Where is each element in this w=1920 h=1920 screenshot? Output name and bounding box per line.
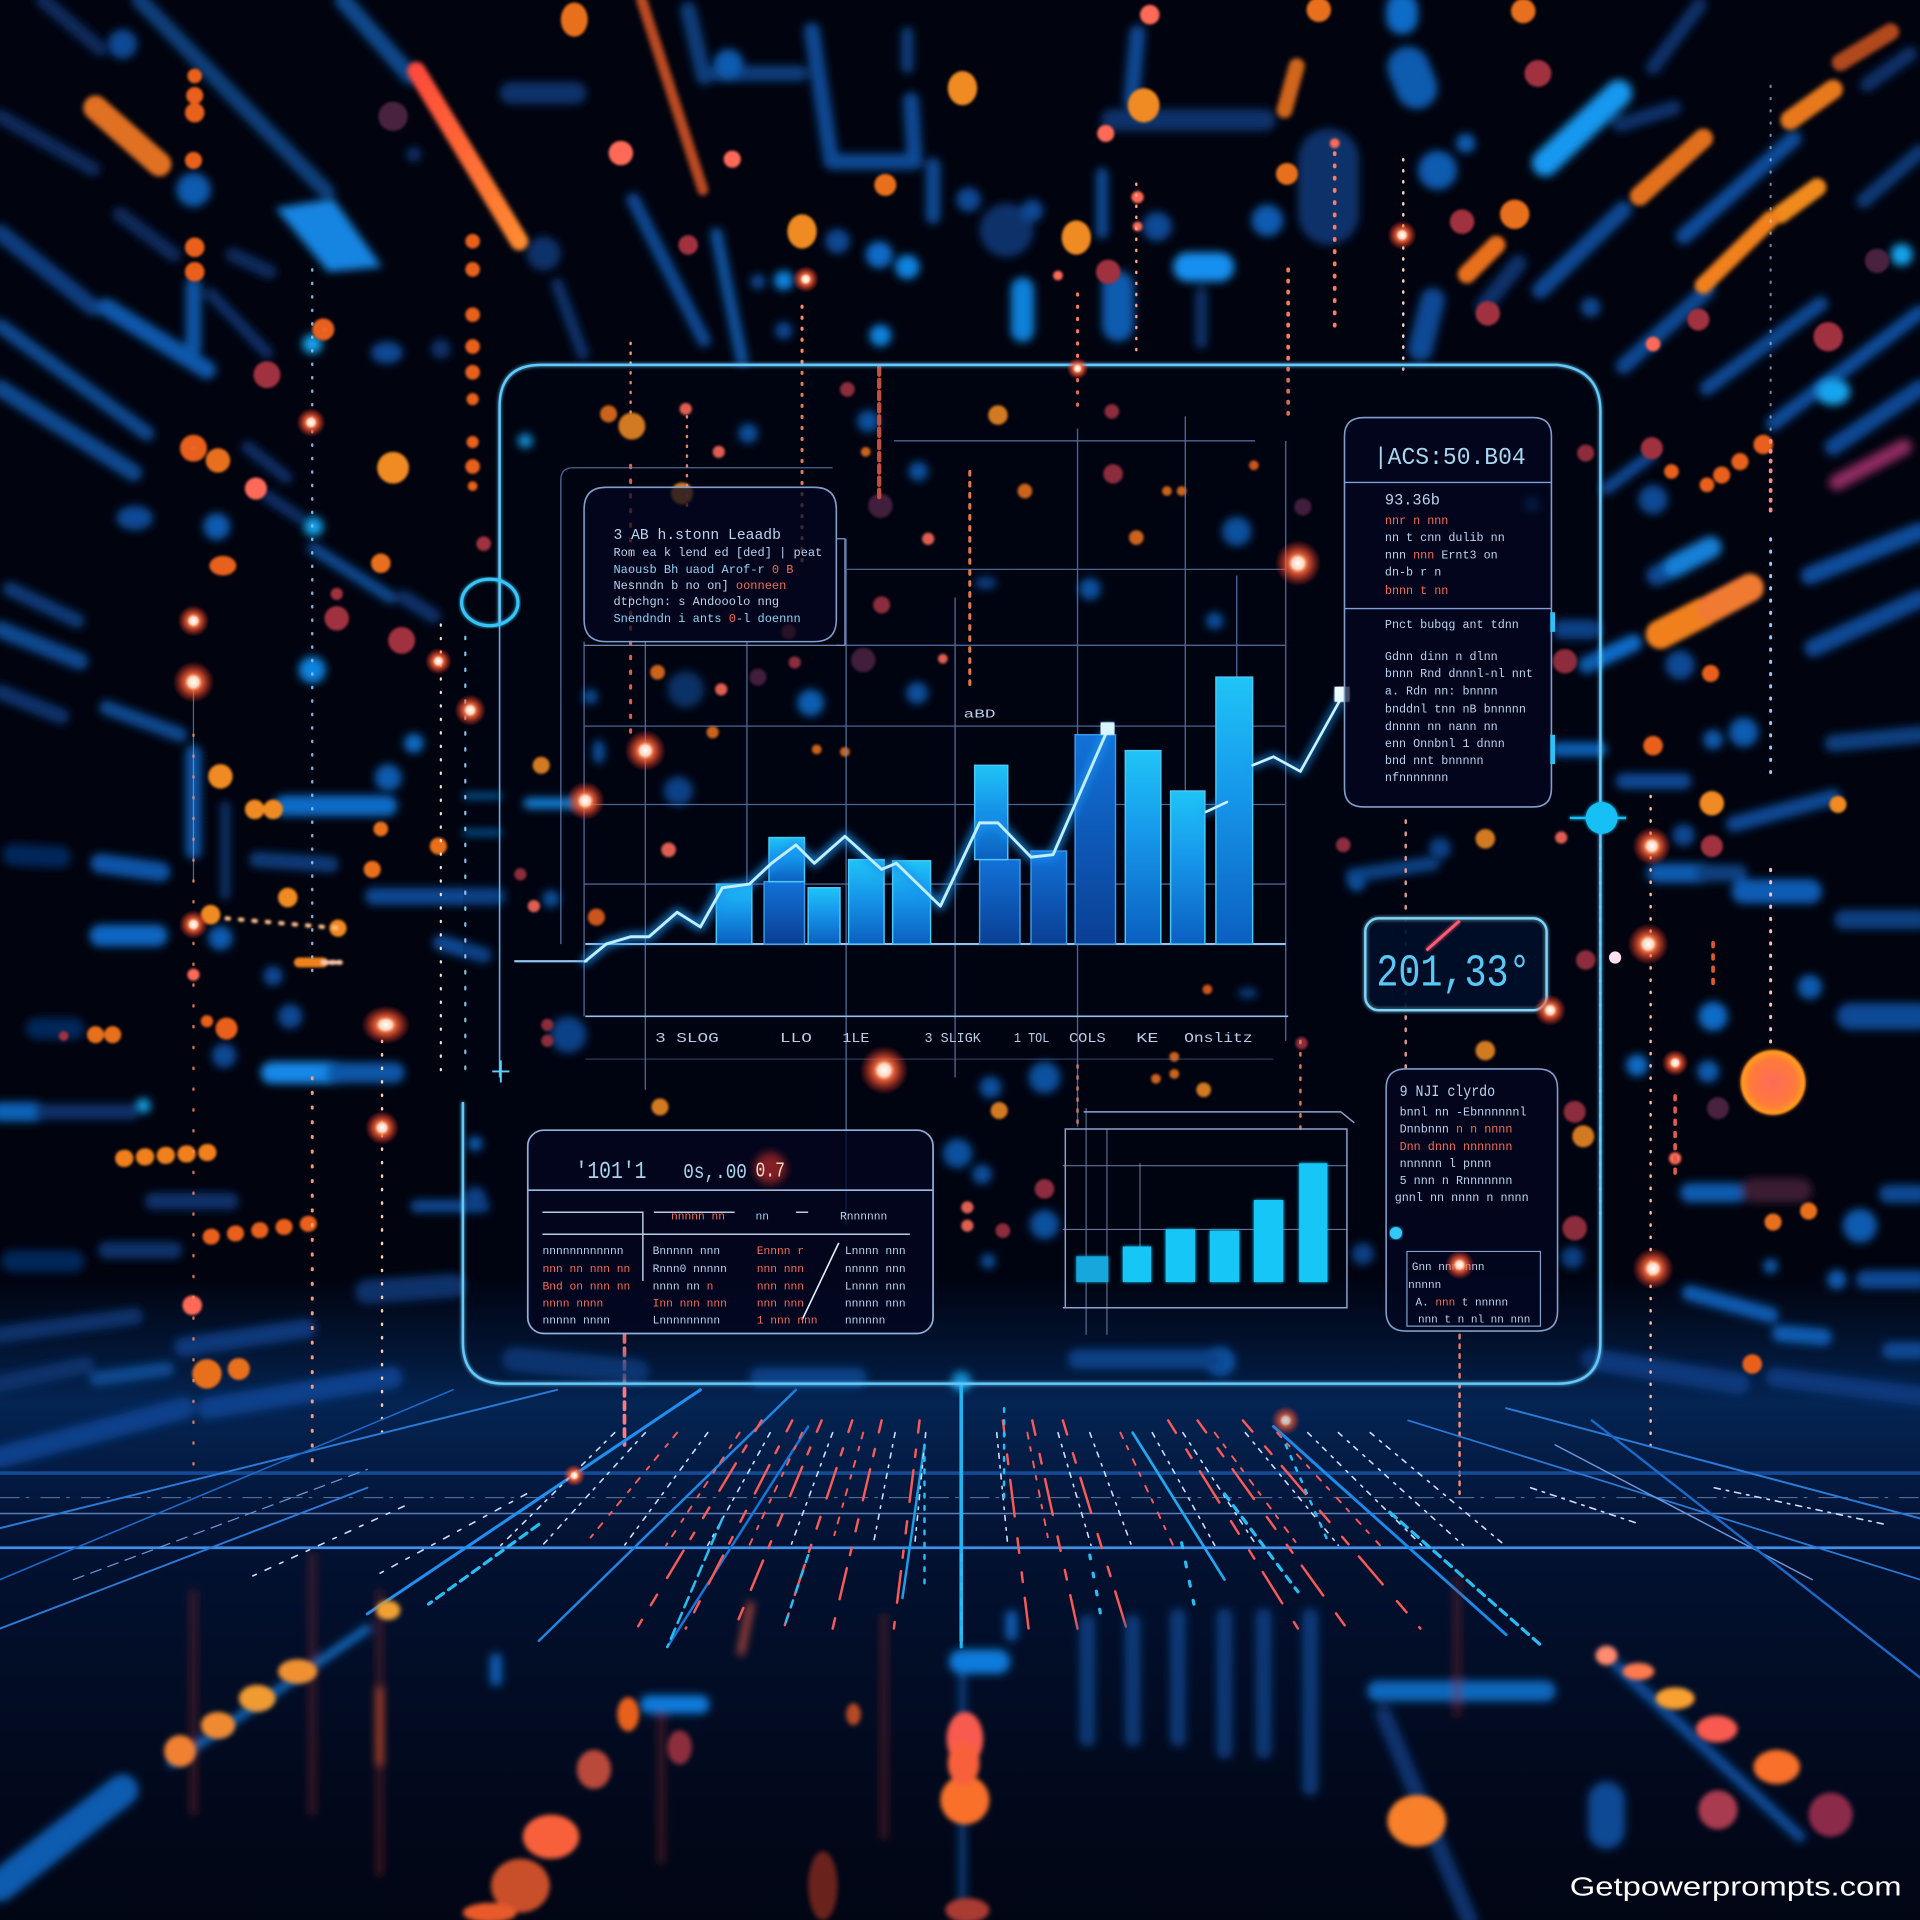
table rows: nnnnn nnnn — [542, 1316, 610, 1328]
floor foreground: blurred streaks and blobs — [0, 1359, 1800, 1920]
x-axis labels: KE — [1136, 1032, 1158, 1047]
floor: perspective grid — [0, 1386, 1920, 1817]
sub card text: nnnnn — [1408, 1280, 1441, 1292]
panel: readout — [1365, 918, 1547, 1010]
chart axes — [514, 944, 1288, 1016]
card text: Naousb Bh uaod Arof-r 0 B — [613, 563, 794, 577]
table rows: nnnnnnnnnnnn — [542, 1246, 623, 1258]
table rows: nnnnn nn — [671, 1212, 725, 1224]
card body — [1386, 1069, 1558, 1331]
card text: nnnnnn l pnnn — [1400, 1157, 1491, 1171]
readout tick — [1427, 921, 1460, 950]
table body — [528, 1130, 933, 1333]
card text: bnd nnt bnnnnn — [1385, 754, 1484, 768]
bars: back layer dark — [764, 735, 1116, 944]
bokeh orange and magenta dots — [59, 0, 1889, 1389]
table rows: nnnnn nnn — [845, 1299, 906, 1311]
x-axis labels: 3 SLOG — [655, 1032, 719, 1047]
table rows: Lnnnn nnn — [845, 1246, 906, 1258]
card text: bnnn Rnd dnnnl-nl nnt — [1385, 667, 1533, 681]
readout value: 201,33° — [1376, 948, 1531, 1000]
card text: a. Rdn nn: bnnnn — [1385, 684, 1498, 698]
card text: 3 AB h.stonn Leaadb — [613, 528, 781, 544]
card body — [1344, 418, 1551, 807]
right wall: blurred blue data bars — [1353, 5, 1920, 1396]
table rows: nnnn nn n — [653, 1281, 713, 1293]
panel: bottom left table — [528, 1130, 933, 1333]
hot glowing points — [173, 220, 1689, 1487]
table rows: nn — [756, 1212, 769, 1224]
icon: right node — [1570, 802, 1626, 834]
table rows: Bnd on nnn nn — [542, 1281, 630, 1293]
floor data dashes: red — [584, 1420, 1420, 1629]
top: blurred blue data bars — [511, 9, 1518, 360]
icon: oval node — [462, 579, 518, 626]
dotted vertical data streams — [193, 86, 1771, 1494]
card text: 9 NJI clyrdo — [1400, 1083, 1495, 1101]
card text: nn t cnn dulib nn — [1385, 531, 1505, 545]
sub card text: nnn t n nl nn nnn — [1418, 1314, 1530, 1326]
sub card text — [1408, 1262, 1530, 1326]
panel: bottom left table: 0s,.00 — [683, 1162, 747, 1185]
table rows: Rnnn0 nnnnn — [653, 1264, 727, 1276]
table rows: nnn nn nnn nn — [542, 1264, 630, 1276]
icon: cross marker — [492, 1060, 509, 1082]
card edge markers — [1551, 612, 1555, 764]
table rows: 1 nnn nnn — [757, 1316, 818, 1328]
panel left rail — [499, 624, 501, 1078]
card text: bnddnl tnn nB bnnnnn — [1385, 703, 1526, 717]
watermark: Getpowerprompts.com — [1570, 1874, 1902, 1902]
readout box — [1365, 918, 1547, 1010]
card text: Pnct bubqg ant tdnn — [1385, 618, 1519, 632]
icon: cyan card dot — [1390, 1227, 1402, 1239]
table rows: nnn nnn — [757, 1264, 804, 1276]
card text: dnnnn nn nann nn — [1385, 720, 1498, 734]
small chart frame — [1063, 1108, 1354, 1335]
floor data dashes: cyan — [429, 1408, 1543, 1647]
x-axis labels: 1 TOL — [1014, 1032, 1049, 1047]
card text: 93.36b — [1385, 491, 1440, 509]
blue bokeh cluster — [108, 29, 1913, 1391]
icon: large orange sphere — [1740, 1049, 1806, 1116]
table heading: '101'1 — [576, 1159, 647, 1186]
floor horizontal grid lines — [0, 1473, 1920, 1817]
table rows: nnn nnn — [757, 1299, 804, 1311]
x-axis labels: LLO — [780, 1032, 812, 1047]
x-axis labels: Onslitz — [1184, 1032, 1253, 1047]
table rows: nnnnnn — [845, 1316, 885, 1328]
floor perspective rays — [0, 1386, 1920, 1678]
card text: Dnn dnnn nnnnnnn — [1400, 1140, 1512, 1154]
table rows — [542, 1212, 906, 1328]
floor data dashes: light — [245, 1433, 1886, 1580]
chart grid — [561, 416, 1286, 1224]
table rows: Ennnn r — [757, 1246, 804, 1258]
table rows: Lnnnnnnnnn — [653, 1316, 720, 1328]
sub card text: Gnn nnnnnnn — [1412, 1262, 1485, 1274]
card text: Snendndn i ants 0-l doennn — [613, 612, 801, 626]
card text: Dnnbnnn n n nnnn — [1400, 1123, 1512, 1137]
x-axis labels — [655, 708, 1253, 1047]
x-axis labels: 3 SLIGK — [924, 1032, 982, 1047]
card text — [613, 528, 822, 626]
panel: small bar chart — [1063, 1108, 1354, 1335]
card text — [1395, 1083, 1529, 1205]
small chart bars — [1076, 1163, 1327, 1282]
bar chart — [716, 677, 1253, 944]
table rows: nnn nnn — [757, 1281, 804, 1293]
floor foreground: orange bokeh — [164, 1600, 1853, 1920]
table rows: Inn nnn nnn — [653, 1299, 727, 1311]
table rows: Rnnnnnn — [840, 1212, 887, 1224]
card text: Nesnndn b no on] oonneen — [613, 579, 786, 593]
card body — [584, 487, 836, 642]
card text: nnn nnn Ernt3 on — [1385, 548, 1498, 562]
card text: enn Onnbnl 1 dnnn — [1385, 737, 1505, 751]
blurred orange streaks — [96, 0, 1891, 634]
card text: Gdnn dinn n dlnn — [1385, 650, 1498, 664]
panel: top right text card — [1344, 418, 1553, 807]
table rows: nnnnn nnn — [845, 1264, 906, 1276]
panel tint — [463, 365, 1600, 1384]
panel: lower right text card — [1386, 1069, 1558, 1331]
card text: nfnnnnnnn — [1385, 771, 1448, 785]
bars: front layer bright — [716, 677, 1253, 944]
x-axis labels: aBD — [964, 708, 996, 722]
sub card — [1407, 1251, 1540, 1326]
card text: bnnl nn -Ebnnnnnnl — [1400, 1106, 1527, 1120]
card heading: |ACS:50.B04 — [1374, 445, 1526, 472]
x-axis labels: 1LE — [842, 1032, 869, 1047]
trend line — [585, 687, 1349, 961]
sub card text: A. nnn t nnnnn — [1416, 1297, 1508, 1309]
table value: 0.7 — [756, 1161, 785, 1184]
panel: top left text card — [584, 487, 845, 645]
icon: red glow behind value — [754, 1152, 786, 1184]
card text: gnnl nn nnnn n nnnn — [1395, 1191, 1529, 1205]
panel outline — [463, 365, 1600, 1384]
table rows: Lnnnn nnn — [845, 1281, 906, 1293]
card text: Rom ea k lend ed [ded] | peat — [613, 546, 822, 560]
table rows: nnnn nnnn — [542, 1299, 603, 1311]
panel: main holographic frame — [462, 365, 1626, 1384]
floor haze — [0, 1273, 1920, 1920]
card text: nnr n nnn — [1385, 514, 1448, 528]
card text — [1385, 491, 1533, 785]
card text: 5 nnn n Rnnnnnnn — [1400, 1174, 1512, 1188]
data chains on the left wall — [124, 918, 340, 1237]
card text: dn-b r n — [1385, 566, 1441, 580]
card text: dtpchgn: s Andooolo nng — [613, 595, 779, 609]
card text: bnnn t nn — [1385, 584, 1448, 598]
x-axis labels: COLS — [1069, 1032, 1106, 1047]
left wall: blurred blue data bars — [0, 0, 574, 1457]
table rows: Bnnnnn nnn — [653, 1246, 720, 1258]
